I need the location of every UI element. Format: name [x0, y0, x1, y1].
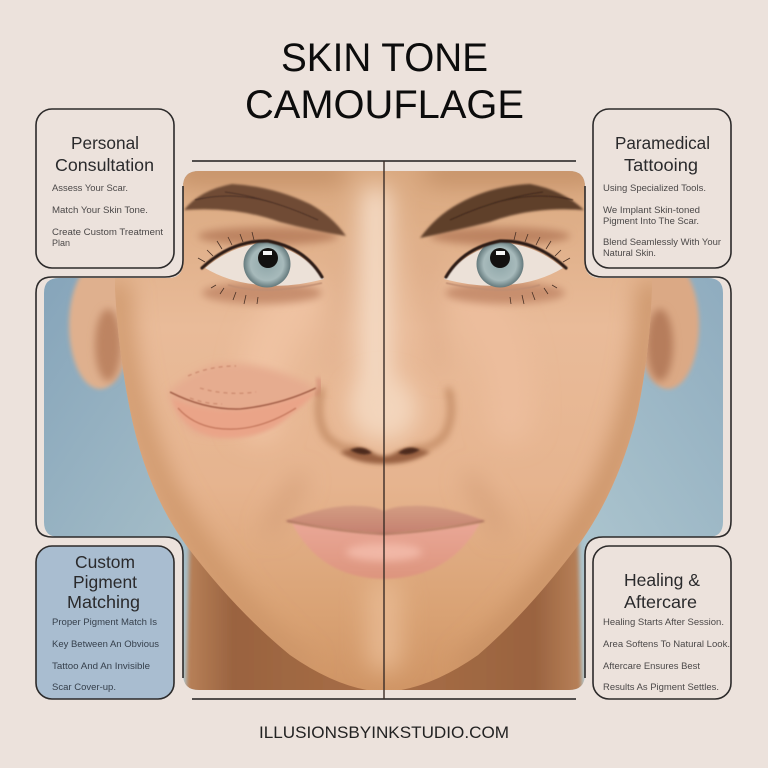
top rule — [192, 160, 576, 162]
panel: paramedical tattooing — [593, 109, 731, 268]
backdrop left — [44, 171, 198, 690]
panel: custom pigment matching — [36, 546, 174, 699]
title: CAMOUFLAGE — [245, 83, 524, 127]
centre divider — [383, 161, 385, 699]
bottom rule — [192, 698, 576, 700]
heading: personal consultation: Personal — [71, 133, 139, 153]
text block: consultation steps: Match Your Skin Tone. — [52, 205, 148, 216]
heading: personal consultation: Consultation — [55, 155, 154, 175]
text block: pigment matching: Key Between An Obvious — [52, 639, 159, 650]
heading: custom pigment matching: Custom — [75, 552, 135, 572]
face shape — [100, 165, 670, 695]
text block: consultation steps: Create Custom Treatment — [52, 227, 163, 238]
right eyebrow — [420, 184, 584, 238]
text block: tattooing steps: We Implant Skin-toned — [603, 205, 700, 216]
nose — [312, 377, 458, 466]
heading: custom pigment matching: Matching — [67, 592, 140, 612]
ears — [69, 261, 699, 389]
heading: personal consultation — [55, 133, 154, 175]
text block: aftercare: Healing Starts After Session. — [603, 617, 724, 628]
portrait photo: split face — [40, 165, 728, 695]
text block: tattooing steps: Pigment Into The Scar. — [603, 216, 699, 227]
frame outline around portrait, right — [585, 186, 731, 678]
heading: custom pigment matching — [67, 552, 140, 612]
text block: aftercare: Aftercare Ensures Best — [603, 661, 700, 672]
left eye — [198, 227, 338, 304]
heading: healing and aftercare: Healing & — [624, 570, 700, 590]
title: SKIN TONE — [281, 36, 488, 80]
text block: tattooing steps: Natural Skin. — [603, 248, 656, 259]
face tonal shading — [118, 172, 650, 665]
left eyebrow — [184, 184, 346, 236]
panel: personal consultation — [36, 109, 174, 268]
text block: aftercare: Area Softens To Natural Look. — [603, 639, 730, 650]
neck — [184, 541, 584, 690]
heading: paramedical tattooing: Tattooing — [624, 155, 698, 175]
backdrop right — [570, 171, 723, 690]
text block: consultation steps: Plan — [52, 238, 70, 249]
text block: consultation steps — [52, 183, 163, 249]
heading: paramedical tattooing — [615, 133, 710, 175]
heading: paramedical tattooing: Paramedical — [615, 133, 710, 153]
right eye — [430, 227, 570, 304]
text block: aftercare — [603, 617, 730, 693]
text block: tattooing steps — [603, 183, 722, 259]
text block: aftercare: Results As Pigment Settles. — [603, 682, 719, 693]
panel: healing and aftercare — [593, 546, 731, 699]
footer website: ILLUSIONSBYINKSTUDIO.COM — [259, 723, 509, 742]
text block: pigment matching: Proper Pigment Match Is — [52, 617, 157, 628]
heading: healing and aftercare — [624, 570, 700, 612]
text block: tattooing steps: Using Specialized Tools. — [603, 183, 706, 194]
text block: pigment matching — [52, 617, 159, 693]
text block: pigment matching: Scar Cover-up. — [52, 682, 116, 693]
heading: healing and aftercare: Aftercare — [624, 592, 697, 612]
title — [245, 36, 524, 127]
lips — [285, 506, 485, 579]
heading: custom pigment matching: Pigment — [73, 572, 137, 592]
text block: tattooing steps: Blend Seamlessly With Your — [603, 237, 722, 248]
text block: pigment matching: Tattoo And An Invisible — [52, 661, 150, 672]
text block: consultation steps: Assess Your Scar. — [52, 183, 128, 194]
scar on left cheek — [168, 363, 320, 438]
frame outline around portrait, left — [36, 186, 183, 678]
